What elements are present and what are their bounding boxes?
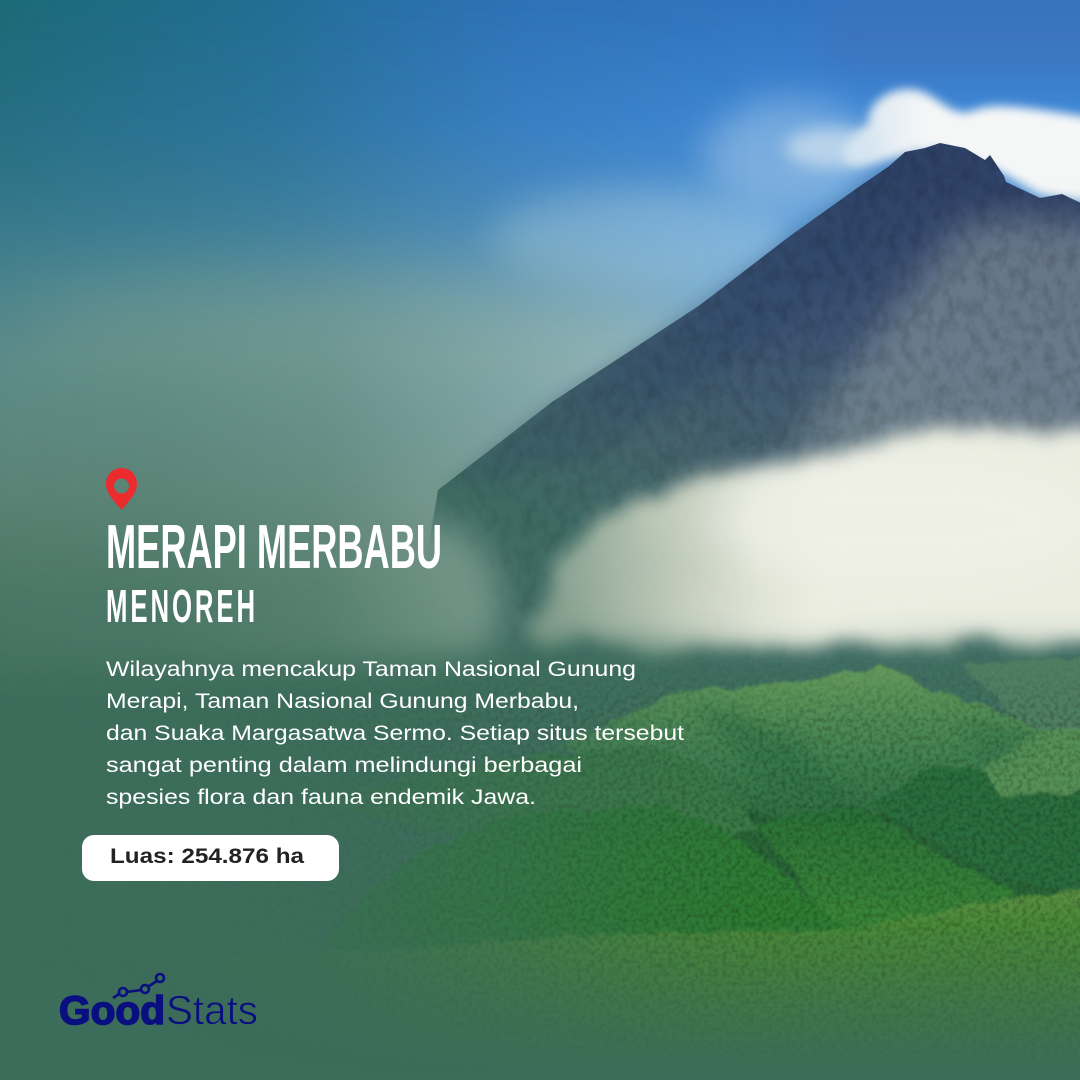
green hills: [0, 650, 1080, 1080]
mountain: [430, 143, 1080, 682]
logo wordmark: Good: [59, 989, 165, 1033]
logo chart line icon: [113, 974, 164, 998]
description text: sangat penting dalam melindungi berbagai: [106, 753, 582, 777]
logo: GoodStats: [59, 974, 258, 1033]
distant dark ridge: [0, 645, 1080, 1080]
title: [106, 513, 442, 632]
soft haze clouds: [20, 100, 875, 400]
left colour overlay: [0, 103, 718, 1054]
description text: dan Suaka Margasatwa Sermo. Setiap situs tersebut: [106, 721, 684, 745]
description text: Wilayahnya mencakup Taman Nasional Gunung: [106, 657, 636, 681]
white summit cloud: [842, 89, 1080, 220]
description text: [106, 657, 684, 809]
lower cloud bank: [540, 430, 1080, 650]
subtitle: Menoreh: MENOREH: [106, 580, 258, 632]
sky: [0, 0, 1080, 720]
icon: location pin: [106, 468, 137, 510]
forest base behind hills: [560, 760, 1080, 960]
description text: Merapi, Taman Nasional Gunung Merbabu,: [106, 689, 579, 713]
area badge: [82, 835, 339, 881]
logo: GoodStats: Stats: [166, 987, 258, 1033]
title line: Merapi Merbabu: MERAPI MERBABU: [106, 513, 442, 582]
grey slope right: [790, 215, 1080, 450]
description text: spesies flora dan fauna endemik Jawa.: [106, 785, 536, 809]
area badge: Luas: 254.876 ha: [110, 845, 304, 868]
bottom colour overlay: [0, 920, 1080, 1080]
